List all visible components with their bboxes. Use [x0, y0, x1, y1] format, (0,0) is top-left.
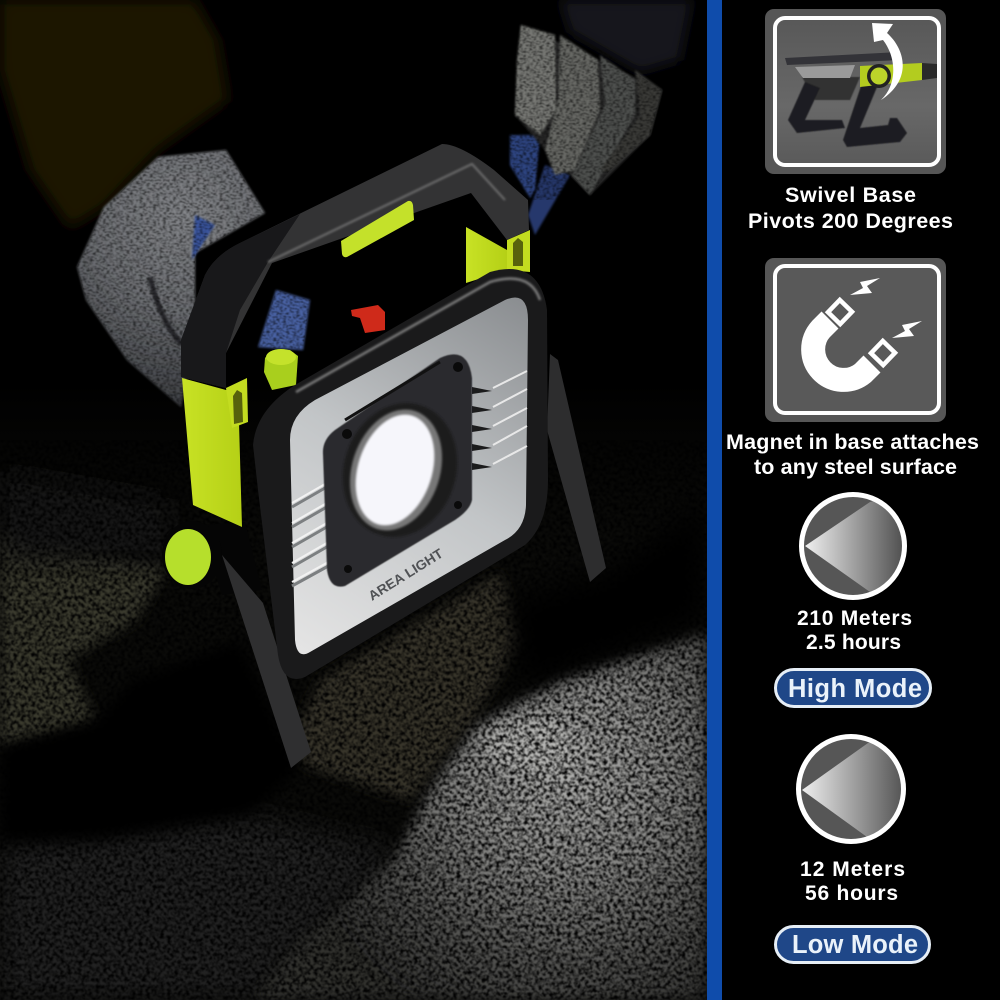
light: red and green switches [264, 305, 385, 390]
blue divider bar [707, 0, 722, 1000]
lens housing [323, 354, 472, 587]
light: hinge housing [200, 522, 262, 595]
stats: high mode: 2.5 hours [806, 631, 901, 654]
swivel legs [788, 77, 907, 147]
right glove [500, 0, 692, 235]
light: side yellow brackets [182, 227, 530, 527]
product label: AREA LIGHT [366, 545, 446, 604]
cooling fins right [493, 371, 527, 464]
caption: swivel base: Swivel Base [785, 183, 916, 207]
caption: swivel base: Pivots 200 Degrees [748, 209, 953, 233]
swivel arrow [872, 23, 903, 100]
left glove [76, 148, 312, 408]
ground: gravel with light pool [0, 464, 707, 1000]
icon: low mode beam [796, 734, 906, 844]
badge: low mode [776, 926, 930, 962]
light: pivot knob [162, 526, 211, 585]
stats: high mode [797, 607, 912, 654]
badge: high mode: High Mode [788, 675, 922, 703]
magnet sparks [850, 278, 880, 295]
caption: magnet [726, 430, 979, 479]
icon: swivel base [765, 9, 946, 174]
icon: high mode beam [802, 490, 915, 600]
caption: magnet: to any steel surface [754, 455, 957, 479]
badge: low mode: Low Mode [792, 931, 918, 959]
badge: high mode [776, 670, 930, 706]
swivel lamp body [785, 52, 900, 65]
handle yellow grip [341, 201, 414, 257]
photo: work light held over gravel at night [0, 0, 707, 1000]
housing screws [342, 362, 463, 573]
cooling fins left [292, 484, 332, 586]
jacket sleeve [0, 0, 228, 228]
caption: swivel base [748, 183, 953, 233]
glowing lens [348, 408, 444, 532]
magnet poles [828, 300, 852, 324]
caption: magnet: Magnet in base attaches [726, 430, 979, 454]
light: legs [222, 354, 606, 768]
stats: low mode [800, 858, 905, 905]
stats: low mode: 56 hours [805, 882, 898, 905]
light: carry handle [181, 144, 529, 388]
magnet body [813, 320, 872, 380]
icon: magnet [765, 258, 946, 422]
light: lamp head [253, 269, 548, 679]
stats: low mode: 12 Meters [800, 858, 905, 881]
silver reflector [290, 298, 528, 654]
stats: high mode: 210 Meters [797, 607, 912, 630]
